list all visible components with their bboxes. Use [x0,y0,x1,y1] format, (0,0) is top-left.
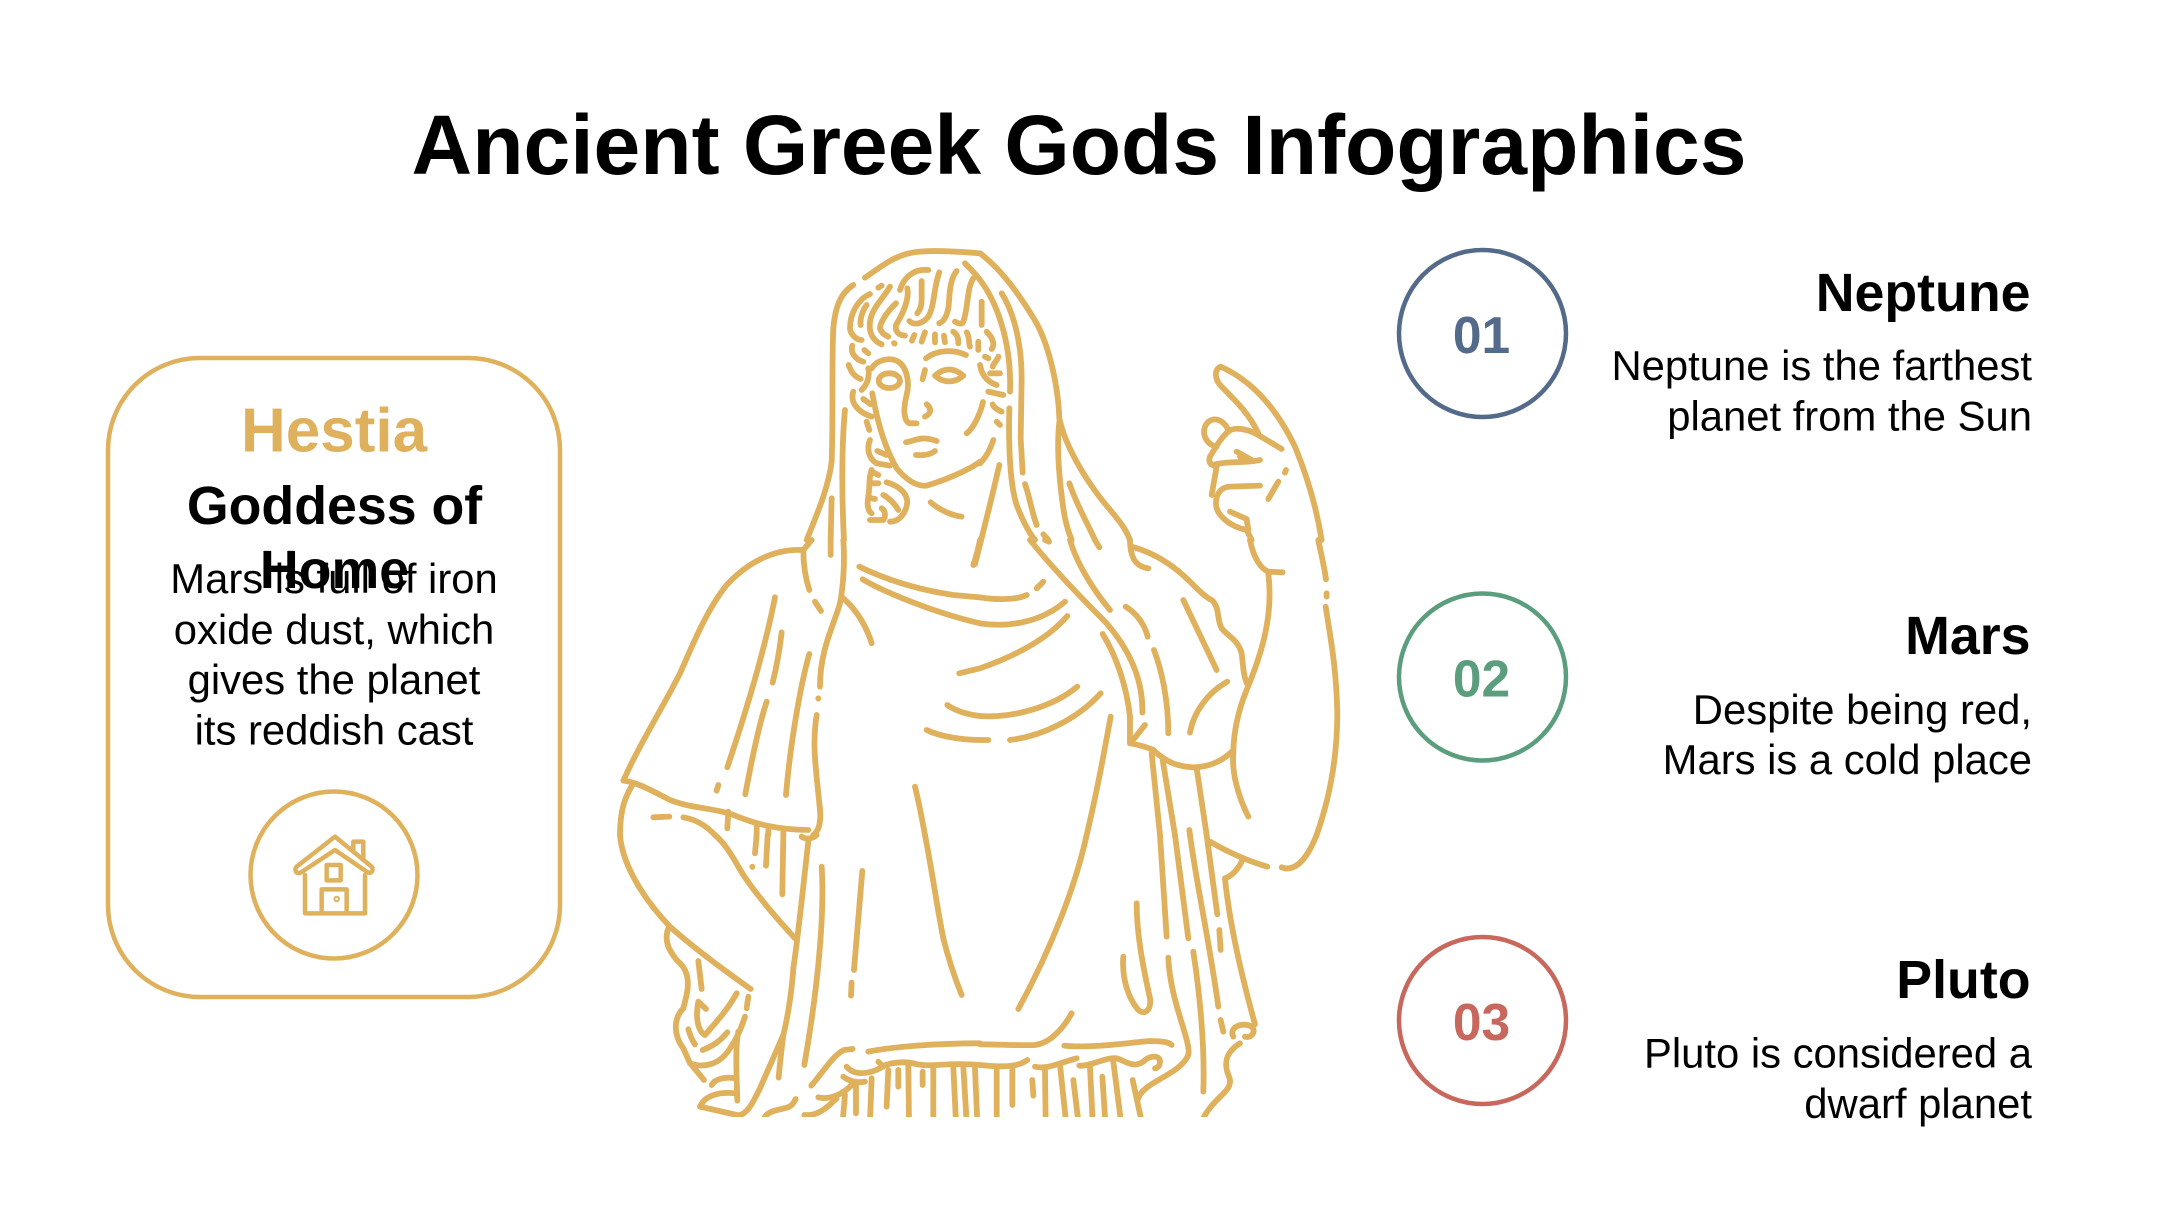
number badge 02: 02 [1453,650,1510,708]
heading: Pluto: Pluto [1896,950,2030,1010]
number badge 02 [1399,594,1566,760]
text block: Hestia description: Mars is full of iron [170,555,498,602]
heading: Mars: Mars [1905,606,2030,666]
illustration: Hestia line drawing [620,251,1337,1122]
number badge 03: 03 [1453,993,1510,1051]
hem and fringe left [804,1043,980,1122]
item 03: Pluto [1399,937,2033,1127]
number badge 03 [1399,937,1566,1104]
figure: lower right robe and hem [980,835,1317,1122]
title: Ancient Greek Gods Infographics [412,98,1746,192]
figure: left shoulder and sleeve [620,540,980,835]
right drapery columns [1123,835,1317,1122]
figure: veil right and raised hand [975,253,1322,564]
neck curls [868,440,962,522]
text block: Hestia description: its reddish cast [195,706,474,754]
veil left [807,251,980,540]
figure: chest folds, right sleeve and forearm [980,540,1337,835]
right curls and jaw [975,302,1003,564]
icon: house in circle [250,792,418,958]
figure: lower left robe and foot [620,835,980,1122]
face [872,351,983,486]
panel: Hestia card [108,358,560,997]
text block: Hestia description: oxide dust, which [174,606,494,653]
text block: Neptune description: planet from the Sun [1667,392,2032,440]
right shoulder [1130,540,1248,685]
text block: Pluto description: Pluto is considered a [1644,1030,2033,1076]
heading: Hestia: Hestia [241,396,428,466]
item 02: Mars [1399,594,2032,783]
item 01: Neptune [1399,250,2032,440]
forearm [1233,540,1337,835]
number badge 01: 01 [1453,306,1510,364]
raised hand [1204,367,1322,540]
text block: Hestia description: gives the planet [188,656,481,703]
collar and chest folds [859,567,980,835]
text block: Mars description: Mars is a cold place [1663,736,2032,783]
subheading: Goddess of Home: Goddess of [187,476,482,536]
text block: Mars description: Despite being red, [1693,686,2032,733]
figure: head, veil and hair [807,251,983,540]
subheading: Goddess of Home: Home [260,540,409,600]
text block: Pluto description: dwarf planet [1804,1080,2032,1127]
number badge 01 [1399,250,1566,417]
heading: Neptune: Neptune [1816,263,2030,323]
text block: Neptune description: Neptune is the farthest [1611,342,2032,389]
veil right [980,253,1130,540]
hair [849,263,980,430]
